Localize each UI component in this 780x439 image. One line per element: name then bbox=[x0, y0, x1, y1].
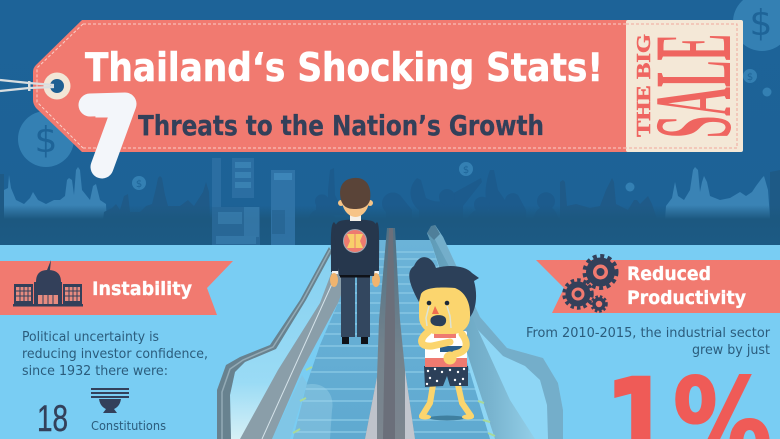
panel: instability bbox=[0, 260, 233, 439]
body text: instability: since 1932 there were: bbox=[22, 363, 168, 379]
left balustrade glass bbox=[230, 250, 340, 439]
left skirt panel bbox=[240, 250, 358, 439]
body text: instability: reducing investor confidence, bbox=[22, 346, 208, 362]
the big sale stamp: THE BIG bbox=[633, 33, 655, 137]
subtitle: Threats to the Nation’s Growth bbox=[138, 109, 544, 142]
icon: dollar coins bbox=[18, 0, 780, 192]
ribbon: instability bbox=[0, 261, 233, 315]
ASEAN logo on shirt bbox=[344, 230, 366, 252]
crying boy bbox=[409, 257, 479, 420]
icon: dollar coins: $ bbox=[136, 179, 142, 190]
boy legs bbox=[422, 385, 471, 416]
icon: dollar coins: $ bbox=[747, 72, 753, 83]
icon: dollar coins: $ bbox=[750, 3, 772, 44]
icon: constitution pedestal bbox=[91, 388, 129, 413]
heading: reduced productivity: Reduced bbox=[627, 263, 711, 285]
centre handrail bbox=[365, 228, 415, 439]
crowd silhouettes bbox=[305, 168, 562, 245]
icon: gears bbox=[564, 256, 616, 312]
icon: dollar coins: $ bbox=[463, 165, 469, 176]
man torso bbox=[335, 220, 377, 276]
left handrail bbox=[217, 247, 332, 439]
tag cream end bbox=[626, 20, 743, 152]
dark blue sky background bbox=[0, 0, 780, 245]
left skyline bbox=[0, 167, 211, 245]
icon: parliament building bbox=[13, 260, 83, 306]
lower shade of the city band bbox=[0, 205, 780, 245]
boy hair bbox=[409, 257, 479, 317]
right skyline bbox=[560, 167, 780, 245]
heading: reduced productivity bbox=[627, 263, 747, 309]
city buildings, centre bbox=[212, 158, 295, 245]
boy shorts bbox=[424, 366, 468, 387]
title: Thailand‘s Shocking Stats! bbox=[85, 46, 603, 91]
boy striped vest bbox=[425, 331, 467, 367]
body text: instability bbox=[22, 329, 208, 379]
man legs bbox=[341, 276, 355, 337]
escalator steps bbox=[293, 240, 490, 439]
body text: productivity: grew by just bbox=[692, 342, 770, 358]
body text: productivity: From 2010-2015, the industrial sector bbox=[526, 325, 770, 341]
boy face bbox=[419, 284, 470, 334]
heading: instability: Instability bbox=[92, 278, 193, 300]
step edge markers bbox=[293, 367, 495, 436]
right handrail bbox=[431, 225, 563, 439]
man neck bbox=[350, 212, 361, 221]
body text: instability: Political uncertainty is bbox=[22, 329, 159, 345]
panel: reduced productivity bbox=[526, 256, 780, 439]
light blue lower background bbox=[0, 245, 780, 439]
man hair bbox=[340, 178, 370, 209]
big number seven: 7 bbox=[92, 93, 128, 177]
big number seven bbox=[90, 93, 128, 177]
boy eyes, nose, mouth and tears bbox=[426, 301, 451, 328]
eyelet with string bbox=[0, 72, 70, 100]
man ears and chin bbox=[338, 200, 373, 217]
body text: productivity bbox=[526, 325, 770, 358]
icon: dollar coins: $ bbox=[35, 120, 57, 161]
tag body bbox=[33, 20, 628, 152]
boy shadow bbox=[429, 416, 465, 420]
right skirt panel bbox=[427, 228, 535, 439]
boy arms bbox=[422, 332, 450, 346]
man on escalator bbox=[330, 178, 380, 344]
stat: 18 constitutions: 18 bbox=[37, 398, 68, 439]
stat: 18 constitutions bbox=[37, 388, 166, 439]
price tag header bbox=[0, 20, 754, 177]
man arms bbox=[331, 222, 342, 272]
escalator bbox=[217, 225, 563, 439]
ribbon: reduced productivity bbox=[536, 260, 780, 313]
heading: reduced productivity: Productivity bbox=[627, 287, 747, 309]
right balustrade glass bbox=[427, 225, 563, 439]
stat: 18 constitutions: Constitutions bbox=[91, 418, 166, 433]
